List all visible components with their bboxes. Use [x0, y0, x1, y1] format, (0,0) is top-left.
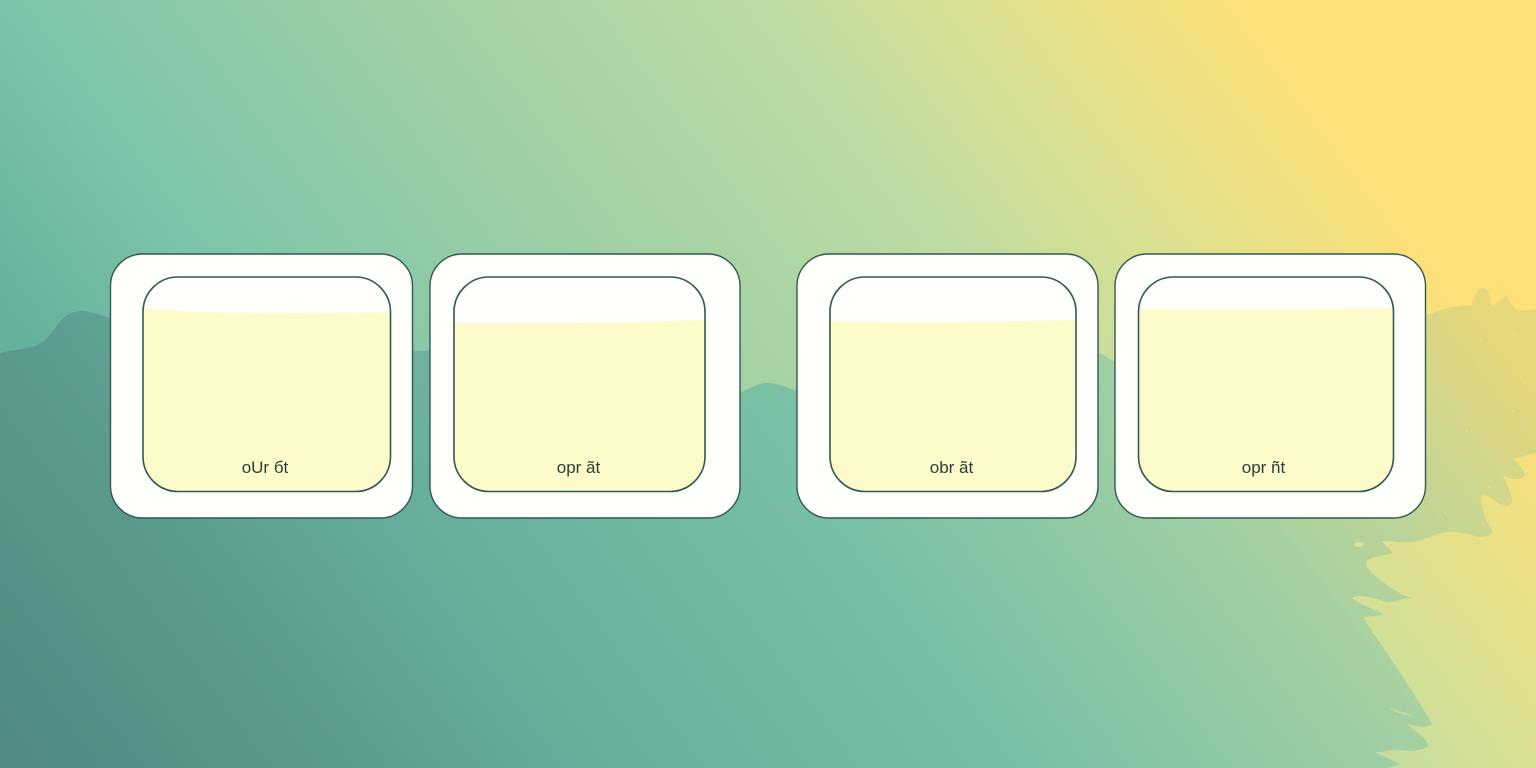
- panel: card 1: [110, 254, 412, 518]
- inner container 3: [830, 277, 1076, 492]
- label 1: oUr бt: [242, 458, 289, 477]
- label 3: obr ãt: [930, 458, 974, 477]
- label 2: opr ãt: [557, 458, 601, 477]
- label 4: opr ñt: [1242, 458, 1286, 477]
- inner container 4: [1138, 277, 1394, 492]
- hill silhouette with splash edge: [0, 288, 1536, 768]
- splash droplets: [1354, 542, 1412, 716]
- inner container 2: [454, 277, 705, 492]
- panel: card 2: [430, 254, 740, 518]
- panel: card 4: [1115, 254, 1426, 518]
- sparkle dots: [1444, 334, 1521, 514]
- panel: card 3: [797, 254, 1098, 518]
- inner container 1: [143, 277, 391, 492]
